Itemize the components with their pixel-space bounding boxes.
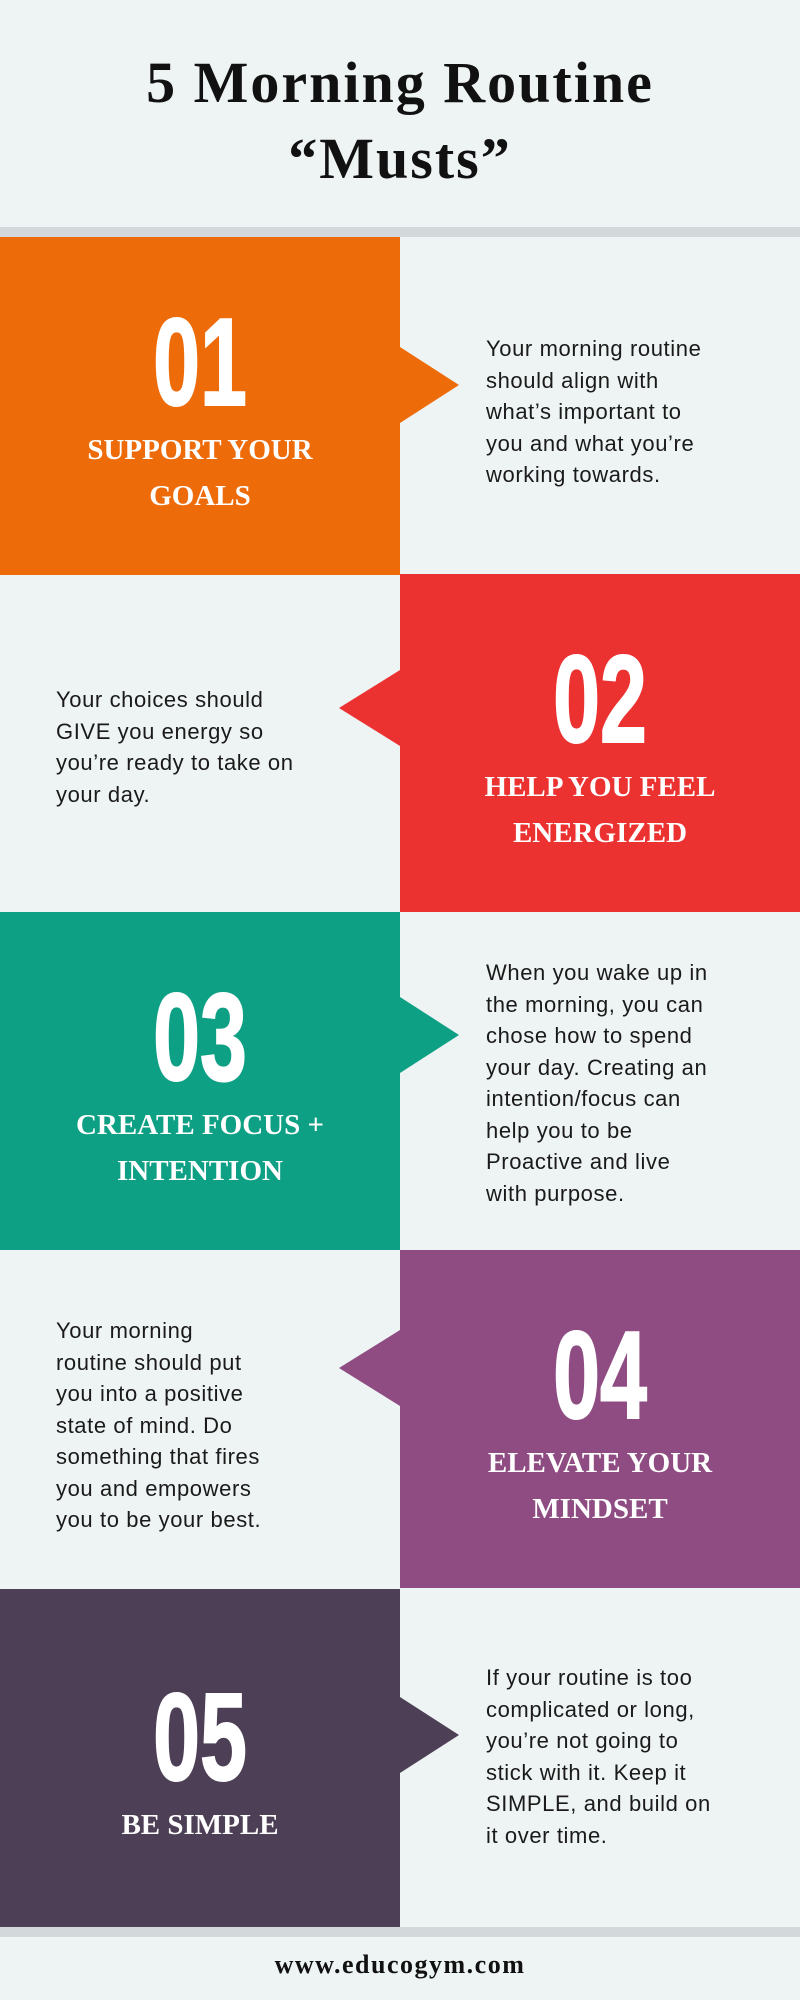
text 05: SIMPLE, and build on xyxy=(486,1791,711,1816)
arrow 02 xyxy=(339,670,400,746)
text 02: Your choices should xyxy=(56,687,264,712)
block 02: ENERGIZED xyxy=(513,817,687,849)
block 04 xyxy=(400,1250,800,1588)
text 05: If your routine is too xyxy=(486,1665,692,1690)
text 03: help you to be xyxy=(486,1118,633,1142)
text 05 xyxy=(486,1665,711,1848)
text 02 xyxy=(56,687,294,806)
text 01: Your morning routine xyxy=(486,336,701,361)
text 05: it over time. xyxy=(486,1822,608,1848)
block 05: BE SIMPLE xyxy=(121,1809,279,1841)
arrow 04 xyxy=(339,1330,400,1406)
block 05: 05 xyxy=(153,1669,247,1807)
text 04: you into a positive xyxy=(56,1381,244,1406)
block 01: GOALS xyxy=(149,480,251,512)
text 05: you’re not going to xyxy=(486,1728,678,1753)
block 03: 03 xyxy=(153,969,247,1107)
block 01: SUPPORT YOUR xyxy=(87,434,313,466)
text 04: Your morning xyxy=(56,1318,193,1343)
text 04 xyxy=(56,1318,261,1532)
text 02: GIVE you energy so xyxy=(56,718,264,744)
text 03 xyxy=(486,960,708,1206)
arrow 01 xyxy=(400,347,459,423)
text 01: what’s important to xyxy=(486,399,682,424)
panel: 05 be simple xyxy=(0,1589,711,1927)
text 01: should align with xyxy=(486,368,659,392)
arrow 05 xyxy=(400,1697,459,1773)
block 04: MINDSET xyxy=(532,1493,668,1525)
text 04: you to be your best. xyxy=(56,1507,261,1532)
text 03: Proactive and live xyxy=(486,1149,670,1174)
title: 5 Morning Routine xyxy=(146,50,654,115)
text 02: you’re ready to take on xyxy=(56,750,294,775)
block 04: ELEVATE YOUR xyxy=(488,1447,712,1479)
text 04: something that fires xyxy=(56,1444,260,1469)
text 04: routine should put xyxy=(56,1350,242,1374)
text 01 xyxy=(486,336,701,487)
text 02: your day. xyxy=(56,782,150,806)
text 04: you and empowers xyxy=(56,1476,251,1500)
text 01: working towards. xyxy=(486,462,661,487)
title xyxy=(146,50,654,191)
arrow 03 xyxy=(400,997,459,1073)
text 03: the morning, you can xyxy=(486,992,703,1016)
block 03: INTENTION xyxy=(117,1155,283,1187)
block 01: 01 xyxy=(153,294,247,432)
text 05: stick with it. Keep it xyxy=(486,1760,686,1784)
block 02: HELP YOU FEEL xyxy=(485,771,715,803)
text 03: your day. Creating an xyxy=(486,1054,707,1080)
footer url: www.educogym.com xyxy=(275,1950,525,1979)
block 05 xyxy=(0,1589,400,1927)
block 04: 04 xyxy=(553,1307,647,1445)
panel: 03 create focus + intention xyxy=(0,912,708,1250)
text 03: chose how to spend xyxy=(486,1023,692,1048)
title: “Musts” xyxy=(288,126,512,191)
text 05: complicated or long, xyxy=(486,1696,695,1722)
text 03: intention/focus can xyxy=(486,1086,681,1111)
block 02: 02 xyxy=(553,631,647,769)
block 03: CREATE FOCUS + xyxy=(76,1109,324,1141)
panel: 02 help you feel energized xyxy=(56,574,800,912)
block 03 xyxy=(0,912,400,1250)
block 01 xyxy=(0,237,400,575)
block 02 xyxy=(400,574,800,912)
text 04: state of mind. Do xyxy=(56,1412,232,1438)
text 01: you and what you’re xyxy=(486,430,694,456)
text 03: When you wake up in xyxy=(486,960,708,985)
text 03: with purpose. xyxy=(486,1180,625,1206)
panel: 04 elevate your mindset xyxy=(56,1250,800,1588)
panel: 01 support your goals xyxy=(0,237,701,575)
